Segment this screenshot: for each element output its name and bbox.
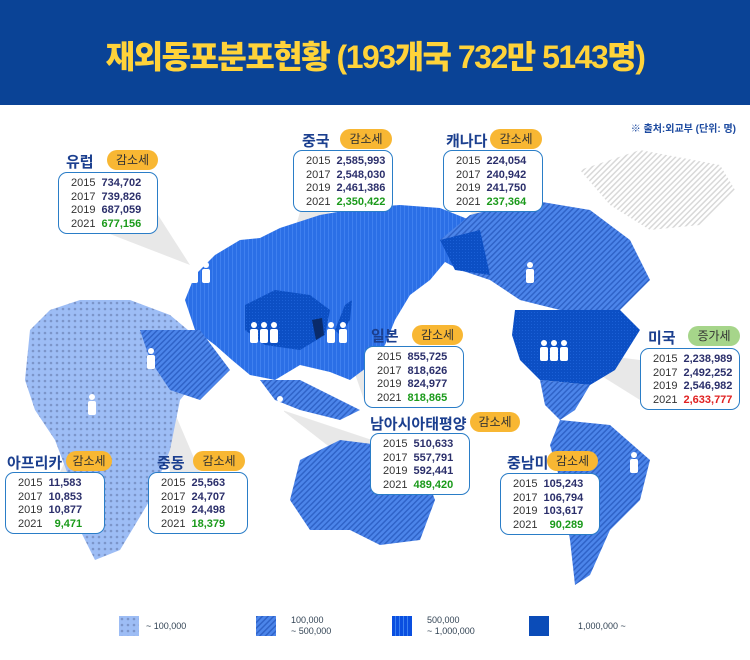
text: 2019 241,750 (456, 182, 526, 194)
people icons (88, 262, 638, 473)
eurasia (500k-1M) (185, 205, 500, 380)
callout: middle east (148, 451, 248, 534)
text: 2015 734,702 (71, 177, 141, 189)
callout: latin america (500, 451, 600, 535)
text: 2015 855,725 (377, 351, 447, 363)
north america canada (440, 200, 650, 310)
text: 2015 224,054 (456, 155, 526, 167)
text: 2021 9,471 (18, 518, 82, 530)
text: 2021 90,289 (513, 518, 583, 530)
text: 감소세 (556, 454, 589, 468)
text: 2017 2,492,252 (653, 366, 732, 378)
text: 1,000,000 ~ (578, 621, 626, 631)
text: 2019 687,059 (71, 204, 141, 216)
source note: ※ 출처:외교부 (단위: 명) (631, 124, 736, 135)
text: 캐나다 (446, 133, 487, 150)
text: 2015 11,583 (18, 477, 82, 489)
callout: usa (640, 326, 740, 410)
text: 2021 818,865 (377, 392, 447, 404)
callout: africa (5, 451, 112, 534)
header bar (0, 0, 750, 105)
text: 유럽 (66, 154, 94, 171)
text: 2017 2,548,030 (306, 168, 385, 180)
callout: japan (364, 325, 464, 408)
text: 2015 510,633 (383, 438, 453, 450)
text: 2017 818,626 (377, 364, 447, 376)
text: 중국 (302, 133, 330, 150)
text: ~ 1,000,000 (427, 626, 475, 636)
callout: china (293, 129, 393, 212)
text: 2017 557,791 (383, 452, 453, 464)
callout: europe (58, 150, 158, 234)
callout: canada (443, 129, 543, 212)
text: 2021 2,350,422 (306, 196, 385, 208)
legend (119, 615, 626, 636)
text: 2021 18,379 (161, 518, 225, 530)
text: 2021 237,364 (456, 196, 526, 208)
text: 2019 24,498 (161, 504, 225, 516)
text: 2015 105,243 (513, 478, 583, 490)
text: 2015 2,238,989 (653, 353, 732, 365)
callout pointer beams (60, 190, 640, 520)
middle east (140, 330, 230, 400)
text: 2019 103,617 (513, 505, 583, 517)
text: 감소세 (72, 454, 106, 468)
text: 2019 2,546,982 (653, 380, 732, 392)
text: 2017 106,794 (513, 492, 583, 504)
text: 감소세 (202, 454, 236, 468)
text: 2019 592,441 (383, 465, 453, 477)
text: 일본 (371, 328, 399, 345)
text: ~ 100,000 (146, 621, 186, 631)
africa (~100k) (25, 300, 205, 560)
text: 감소세 (349, 132, 383, 146)
text: 감소세 (116, 153, 149, 167)
australia (290, 440, 435, 545)
text: 500,000 (427, 615, 460, 625)
text: ~ 500,000 (291, 626, 331, 636)
text: 2017 739,826 (71, 190, 141, 202)
southeast asia (260, 380, 360, 420)
usa (1M+) (512, 310, 640, 385)
china (1M+) (245, 290, 330, 350)
title: 재외동포분포현황 (193개국 732만 5143명) (106, 39, 644, 75)
japan (335, 300, 352, 335)
text: 2019 10,877 (18, 504, 82, 516)
text: 중남미 (507, 455, 548, 472)
text: 2021 2,633,777 (653, 394, 732, 406)
text: 2021 677,156 (71, 218, 141, 230)
korea (312, 318, 324, 340)
mexico/central america (540, 380, 590, 420)
text: 2015 25,563 (161, 477, 225, 489)
text: 2019 824,977 (377, 378, 447, 390)
text: 2017 10,853 (18, 490, 82, 502)
text: 아프리카 (7, 455, 62, 472)
south america (550, 420, 650, 585)
text: 100,000 (291, 615, 324, 625)
text: 2015 2,585,993 (306, 155, 385, 167)
callout: south asia pacific (370, 412, 520, 495)
text: 2017 240,942 (456, 168, 526, 180)
text: 증가세 (697, 329, 731, 343)
text: 감소세 (478, 415, 512, 429)
text: 감소세 (421, 328, 454, 342)
text: 남아시아태평양 (370, 416, 467, 433)
text: 감소세 (499, 132, 533, 146)
text: 중동 (157, 455, 185, 472)
text: 2019 2,461,386 (306, 182, 385, 194)
text: 미국 (648, 330, 676, 347)
greenland (580, 150, 735, 230)
text: 2021 489,420 (383, 478, 453, 490)
text: 2017 24,707 (161, 490, 225, 502)
alaska (440, 230, 490, 275)
